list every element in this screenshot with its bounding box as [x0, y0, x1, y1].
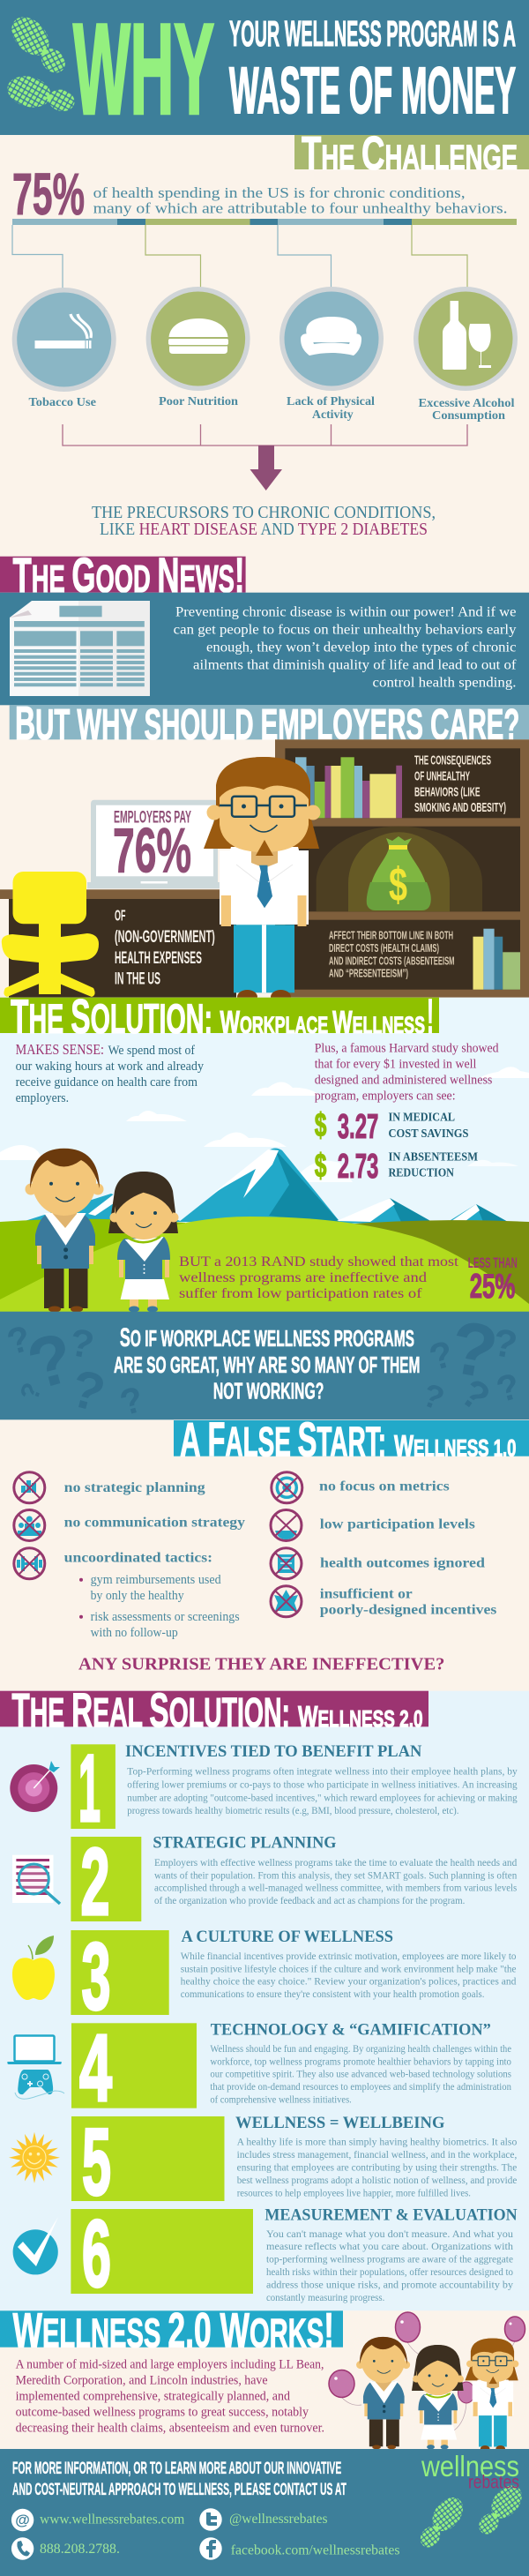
body: measurement: address those unique risks, and promote accountability by: [266, 2280, 513, 2291]
question marks: ?: [3, 1318, 34, 1362]
text: makes sense: our waking hours at work and already: [16, 1060, 204, 1074]
text: preventing chronic disease: ailments that diminish quality of life and lead to out of: [193, 657, 517, 672]
body: culture: communications to ensure they're consistent with your health promotion goals.: [181, 1989, 485, 2000]
heading: the solution: THE SOLUTION:: [11, 989, 212, 1044]
stat: 2.73: $: [315, 1148, 326, 1185]
title: culture: A CULTURE OF WELLNESS: [182, 1928, 393, 1946]
list: tactics bullets: [79, 1573, 240, 1640]
text: makes sense: employers.: [16, 1091, 69, 1105]
icon: books top: [291, 757, 402, 818]
body: strategic planning: Employers with effective wellness programs take the time to evaluate the health needs and: [154, 1858, 518, 1868]
contact: phone: [11, 2537, 120, 2560]
title: measurement: MEASUREMENT & EVALUATION: [264, 2207, 518, 2225]
stat: 3.27: [315, 1107, 469, 1146]
icon: couch: [279, 287, 384, 391]
icon: no dumbbell: [14, 1548, 45, 1579]
text: uncoordinated tactics: uncoordinated tactics:: [64, 1551, 212, 1566]
stat: 3.27: $: [315, 1107, 326, 1144]
number box 5: [71, 2108, 224, 2214]
text: employers examples: Meredith Corporation, and Lincoln industries, have: [16, 2373, 268, 2387]
heading: the real solution: THE REAL SOLUTION:: [11, 1682, 290, 1737]
ground hills: [0, 1217, 529, 1312]
text: rand study: wellness programs are ineffective and: [179, 1270, 427, 1285]
stat: less than 25 percent: [468, 1254, 518, 1306]
label: lack of physical activity: Activity: [312, 408, 354, 421]
question marks: [3, 1305, 524, 1424]
text: preventing chronic disease: Preventing chronic disease is within our power! And if we: [175, 604, 517, 619]
text: rand study: BUT a 2013 RAND study showed that most: [179, 1254, 459, 1269]
body: measurement: constantly measuring progress.: [266, 2293, 384, 2303]
contact: website: [11, 2509, 184, 2531]
body: measurement: [266, 2229, 513, 2303]
body: technology: that provide on-demand resources to employees and simplify the administration: [210, 2082, 511, 2093]
question marks: ?: [15, 1379, 48, 1404]
text: the consequences: BEHAVIORS (LIKE: [414, 784, 481, 799]
text: rand study: suffer from low participation rates of: [179, 1286, 422, 1301]
number box 3: 3: [81, 1922, 111, 2029]
number box 3: [71, 1922, 169, 2029]
icon: no chart: [14, 1472, 45, 1503]
text: preventing chronic disease: control health spending.: [372, 675, 517, 690]
contact: twitter: [199, 2508, 328, 2531]
heading: a false start: A FALSE START:: [180, 1412, 386, 1467]
text: the precursors: LIKE HEART DISEASE AND TYPE 2 DIABETES: [100, 520, 428, 539]
text: any surprise: ANY SURPRISE THEY ARE INEFFECTIVE?: [78, 1654, 444, 1674]
body: incentives: progress towards healthy biometric results (e.g, BMI, blood pressure, cholesterol, etc).: [127, 1806, 459, 1816]
stat: 2.73: [315, 1148, 478, 1186]
icon: sun: [9, 2132, 60, 2183]
panel: question band: [0, 1305, 529, 1424]
text: of non-government health expenses: HEALTH EXPENSES: [115, 949, 202, 968]
stat: 3.27: IN MEDICAL: [388, 1112, 455, 1125]
text: affect their bottom line: DIRECT COSTS (HEALTH CLAIMS): [329, 942, 439, 955]
icon: yellow chair: [2, 872, 99, 997]
text: makes sense: We spend most of: [108, 1044, 195, 1058]
text: preventing chronic disease: can get people to focus on their unhealthy behaviors early: [174, 622, 516, 637]
panel: desk: [0, 889, 236, 998]
text: so if workplace wellness: NOT WORKING?: [213, 1378, 324, 1404]
question marks: ?: [443, 1305, 503, 1396]
text: harvard study: [315, 1042, 499, 1104]
icon: laptop and gamepad: [7, 2036, 64, 2099]
body: incentives: number are adopting "outcome-based incentives," which reward employees for achieving or making: [127, 1793, 518, 1803]
text: rand study: [179, 1254, 459, 1301]
heading: wellness 2.0 works: WELLNESS 2.0 WORKS!: [12, 2303, 334, 2358]
text: of non-government health expenses: (NON-GOVERNMENT): [115, 928, 215, 947]
question marks: ?: [115, 1379, 147, 1423]
body: technology: [210, 2044, 511, 2105]
icon: no incentives star: [271, 1586, 302, 1617]
body: technology: Wellness should be fun and engaging. By organizing health challenges within the: [210, 2044, 511, 2055]
icon: target: [10, 1761, 60, 1812]
contact: facebook: [199, 2537, 400, 2560]
body: strategic planning: [154, 1858, 518, 1906]
icon: apple: [12, 1936, 55, 2000]
body: measurement: You can't manage what you don't measure. And what you: [266, 2229, 513, 2240]
number box 6: [71, 2200, 253, 2307]
question marks: ?: [64, 1358, 111, 1424]
question marks: ?: [489, 1321, 520, 1367]
text: insufficient incentives: [320, 1586, 496, 1617]
body: measurement: top-performing wellness programs are aware of the aggregate: [266, 2255, 513, 2265]
text: affect their bottom line: [329, 929, 455, 980]
label: tobacco use: Tobacco Use: [28, 395, 96, 408]
step 6: [13, 2200, 518, 2307]
panel: solution background: [0, 998, 529, 1312]
text: employers examples: outcome-based wellness programs to great success, notably: [16, 2405, 309, 2419]
text: harvard study: program, employers can see:: [315, 1090, 456, 1104]
text: the precursors: THE PRECURSORS TO CHRONIC CONDITIONS,: [92, 503, 436, 522]
title: incentives: INCENTIVES TIED TO BENEFIT PLAN: [125, 1743, 422, 1761]
stat: 75 percent: many of which are attributable to four unhealthy behaviors.: [93, 199, 508, 217]
body: strategic planning: of the organization who provide feedback and act as champions for the program.: [154, 1896, 466, 1906]
stat: 2.73: 2.73: [338, 1148, 378, 1186]
step 5: [9, 2108, 518, 2214]
question marks: ?: [418, 1376, 449, 1418]
text: preventing chronic disease: [174, 604, 517, 690]
icon: document magnifier: [12, 1855, 60, 1904]
colored bar and connectors: [12, 219, 517, 288]
text: the consequences: [414, 753, 506, 815]
question marks: ?: [425, 1332, 458, 1378]
body: incentives: Top-Performing wellness programs often integrate wellness into their employee health plans, by: [127, 1767, 518, 1778]
text: employers examples: decreasing their health claims, absenteeism and even turnover.: [16, 2421, 324, 2435]
body: technology: of comprehensive wellness initiatives.: [210, 2094, 352, 2105]
heading: the good news: THE GOOD NEWS!: [12, 547, 245, 603]
title: technology: TECHNOLOGY & “GAMIFICATION”: [211, 2021, 491, 2039]
icon: tobacco: [12, 288, 116, 392]
body: wellbeing: A healthy life is more than simply having healthy biometrics. It also: [237, 2138, 518, 2148]
text: harvard study: that for every $1 invested in well: [315, 1058, 476, 1072]
list: tactics bullets: with no follow-up: [91, 1626, 178, 1640]
body: strategic planning: accomplished through a well-managed wellness committee, with members from various levels: [154, 1883, 517, 1894]
contact: website: www.wellnessrebates.com: [40, 2512, 184, 2527]
icon: footer footprints: [414, 2480, 528, 2554]
number box 1: [71, 1734, 115, 1841]
title: wellness = wellbeing: WELLNESS = WELLBEING: [235, 2115, 444, 2132]
text: low participation levels: low participation levels: [320, 1517, 475, 1532]
label: poor nutrition: Poor Nutrition: [159, 394, 239, 408]
body: culture: sustain positive lifestyle choices if the culture and work environment help make "the: [181, 1964, 516, 1974]
text: of non-government health expenses: OF: [115, 906, 126, 924]
mountains: [22, 1149, 508, 1224]
icon: wine: [414, 287, 518, 391]
question marks: ?: [452, 1369, 498, 1420]
contact: twitter: @wellnessrebates: [229, 2512, 328, 2527]
contact: website: @: [15, 2512, 30, 2528]
body: wellbeing: [237, 2138, 518, 2199]
text: no strategic planning: no strategic planning: [64, 1480, 205, 1495]
icon: no target: [272, 1472, 302, 1503]
icon: no communication: [14, 1510, 45, 1540]
icon: money bag: [317, 827, 482, 911]
step 4: [7, 2014, 511, 2121]
body: wellbeing: resources to help employees live happier, more fulfilled lives.: [237, 2189, 471, 2199]
contact: facebook: facebook.com/wellnessrebates: [231, 2543, 400, 2558]
panel: real solution background: [0, 1691, 529, 2310]
panel: footer: [0, 2449, 529, 2576]
stat: 75 percent: of health spending in the US is for chronic conditions,: [93, 184, 466, 201]
icon: laptop with stat: 76%: [113, 816, 191, 886]
question marks: ?: [19, 1317, 82, 1404]
number box 4: 4: [79, 2014, 112, 2121]
icon: money bag: $: [389, 858, 407, 911]
text: insufficient incentives: insufficient or: [320, 1586, 413, 1601]
figure: man: [25, 1149, 104, 1313]
text: no communication strategy: no communication strategy: [64, 1516, 245, 1531]
body: technology: workforce, top wellness programs promote healthier behaviors by tapping into: [210, 2056, 511, 2067]
body: culture: While financial incentives provide extrinsic motivation, employees are more likely to: [181, 1951, 517, 1962]
body: wellbeing: includes stress management, financial wellness, and in the workplace,: [237, 2150, 517, 2160]
icon: laptop with stat: [87, 800, 222, 888]
icon: burger: [146, 287, 250, 391]
text: affect their bottom line: AND “PRESENTEEISM”): [329, 968, 408, 980]
text: employers examples: [16, 2357, 324, 2435]
body: technology: our competitive spirit. They also use advanced web-based technology solutions: [210, 2070, 511, 2080]
icon: books bottom: [473, 929, 520, 990]
label: lack of physical activity: Lack of Physical: [287, 394, 375, 408]
icon: laptop with stat: EMPLOYERS PAY: [114, 808, 191, 827]
label: excessive alcohol consumption: Excessive Alcohol: [418, 396, 515, 409]
text: the precursors: [92, 503, 436, 539]
heading: the solution: !: [427, 988, 434, 1044]
text: of non-government health expenses: [115, 906, 215, 989]
body: wellbeing: best wellness programs adopt a holistic notion of wellness, and provide: [237, 2175, 517, 2186]
step 2: [12, 1828, 518, 1935]
text: health outcomes ignored: health outcomes ignored: [320, 1556, 485, 1571]
label: excessive alcohol consumption: Consumption: [432, 408, 506, 422]
stat: 75 percent: 75%: [12, 161, 85, 228]
heading: the real solution: WELLNESS 2.0: [298, 1700, 423, 1734]
figure: woman: [108, 1172, 178, 1313]
icon: newspaper: [10, 601, 150, 696]
stat: 3.27: 3.27: [338, 1108, 378, 1146]
body: culture: [181, 1951, 517, 2000]
body: incentives: offering lower premiums or co-pays to those who participate in wellness initiatives. An increasing: [127, 1780, 518, 1791]
figures: celebrating team: [356, 2337, 518, 2452]
number box 6: 6: [82, 2200, 111, 2307]
heading: the solution: WORKPLACE WELLNESS: [220, 1004, 425, 1040]
title: strategic planning: STRATEGIC PLANNING: [153, 1834, 337, 1852]
icon: check: [13, 2217, 58, 2274]
panel: bookshelf: [275, 739, 529, 998]
body: culture: healthy choice the easy choice." Review your organization's polices, practices and: [181, 1977, 517, 1988]
step 3: [12, 1922, 517, 2029]
balloons: [329, 2312, 525, 2430]
text: the consequences: OF UNHEALTHY: [414, 768, 470, 783]
label: excessive alcohol consumption: [418, 396, 515, 422]
icon: no outcomes: [271, 1548, 302, 1579]
stat: 75 percent: [12, 161, 508, 228]
number box 5: 5: [82, 2108, 111, 2214]
text: employers examples: implemented comprehensive, strategically planned, and: [16, 2389, 290, 2403]
number box 1: 1: [78, 1734, 101, 1841]
panel: wellness works background: [0, 2310, 529, 2449]
panel: header: [0, 0, 529, 141]
text: call to action: [12, 2459, 346, 2499]
body: incentives: [127, 1767, 518, 1816]
body: measurement: measure reflects what you care about. Organizations with: [266, 2242, 513, 2252]
body: strategic planning: wants of their population. From this analysis, they set SMART goals. Such planning is often: [154, 1870, 518, 1881]
step 1: [10, 1734, 518, 1841]
text: harvard study: Plus, a famous Harvard study showed: [315, 1042, 499, 1056]
panel: good news: [0, 593, 529, 705]
text: no focus on metrics: no focus on metrics: [319, 1479, 450, 1494]
question marks: ?: [66, 1321, 97, 1367]
text: preventing chronic disease: enough, they won’t develop into the types of chronic: [206, 640, 517, 655]
list: tactics bullets: by only the healthy: [91, 1589, 184, 1603]
body: wellbeing: ensuring that employees are contributing by using their strengths. The: [237, 2163, 517, 2174]
stat: 3.27: COST SAVINGS: [388, 1127, 469, 1141]
number box 2: 2: [81, 1828, 109, 1935]
bracket and arrow: [63, 424, 467, 490]
heading: the solution: [0, 988, 439, 1044]
text: makes sense: receive guidance on health care from: [16, 1075, 197, 1090]
text: harvard study: designed and administered wellness: [315, 1074, 493, 1088]
figure: employer: [204, 757, 321, 1004]
label: lack of physical activity: [287, 394, 375, 421]
panel: header: WHY: [73, 0, 214, 141]
text: insufficient incentives: poorly-designed incentives: [320, 1602, 496, 1617]
body: measurement: health risks within their populations, offer resources designed to: [266, 2267, 513, 2278]
clouds: [0, 1067, 529, 1182]
text: makes sense: MAKES SENSE:: [16, 1041, 104, 1058]
number box 4: [71, 2014, 197, 2121]
list: tactics bullets: risk assessments or screenings: [91, 1610, 240, 1624]
text: makes sense: [16, 1041, 204, 1105]
icon: footprints: [4, 10, 78, 118]
contact: phone: 888.208.2788.: [40, 2542, 120, 2557]
text: so if workplace wellness: [114, 1323, 421, 1404]
text: employers examples: A number of mid-sized and large employers including LL Bean,: [16, 2357, 324, 2371]
logo: wellness rebates: rebates: [468, 2473, 519, 2493]
icon: no participation gauge: [271, 1510, 302, 1540]
stat: 2.73: REDUCTION: [388, 1166, 454, 1179]
stat: 2.73: IN ABSENTEESM: [388, 1151, 478, 1164]
list: tactics bullets: gym reimbursements used: [91, 1573, 221, 1587]
question marks: ?: [492, 1366, 524, 1410]
text: of non-government health expenses: IN THE US: [115, 970, 160, 989]
